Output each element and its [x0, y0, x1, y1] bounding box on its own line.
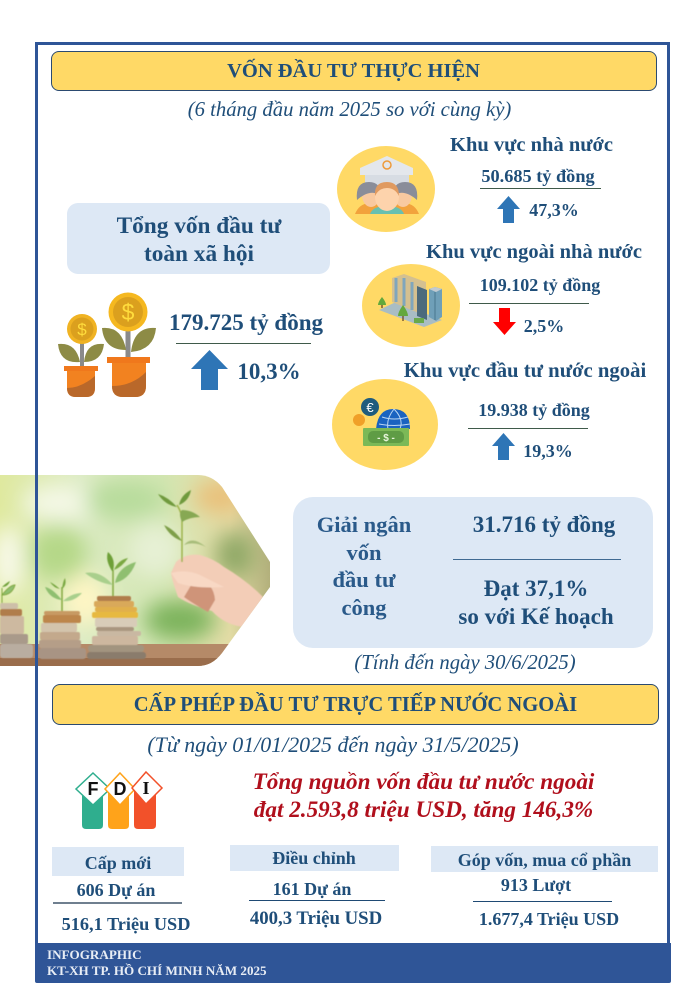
icon: foreign investment: - $ - — [377, 433, 395, 444]
heading: Vốn đầu tư thực hiện: VỐN ĐẦU TƯ THỰC HIỆN — [227, 60, 480, 82]
value: contribution capital: 1.677,4 Triệu USD — [479, 909, 619, 929]
footer text: INFOGRAPHIC — [47, 947, 142, 962]
panel: new licences header — [52, 847, 184, 876]
subtitle: FDI period: (Từ ngày 01/01/2025 đến ngày 31/5/2025) — [147, 732, 519, 757]
value: contribution count: 913 Lượt — [501, 875, 571, 895]
text: public investment label — [317, 512, 411, 620]
icon: foreign investment: € — [366, 400, 374, 415]
banner: heading 2 — [52, 684, 659, 725]
footer text — [47, 947, 267, 978]
value: plan percentage: Đạt 37,1% — [484, 576, 588, 601]
subtitle: period: (6 tháng đầu năm 2025 so với cùng kỳ) — [188, 99, 511, 121]
value: total: 179.725 tỷ đồng — [169, 310, 323, 335]
panel: adjustment header — [230, 845, 399, 871]
value: total growth: 10,3% — [237, 359, 301, 384]
seedlings — [112, 570, 114, 596]
footer band — [35, 943, 670, 983]
icon: arrow up — [191, 350, 228, 390]
icon: FDI: D — [114, 779, 126, 799]
icon: arrow up — [497, 196, 520, 223]
banner: heading 1 — [51, 51, 657, 91]
coins right — [97, 596, 131, 601]
value: non-state sector: 109.102 tỷ đồng — [480, 275, 600, 295]
icon: arrow down — [493, 308, 516, 335]
text: total investment: Tổng vốn đầu tư — [117, 213, 281, 239]
hand — [171, 555, 263, 627]
icon: FDI — [75, 770, 163, 829]
callout: total FDI: Tổng nguồn vốn đầu tư nước ngoài — [253, 769, 594, 795]
heading: foreign sector: Khu vực đầu tư nước ngoài — [404, 360, 646, 382]
text: adjustment: Điều chỉnh — [272, 848, 356, 868]
value: plan percentage: so với Kế hoạch — [458, 604, 614, 629]
icon: foreign investment — [332, 379, 438, 470]
icon: FDI: F — [88, 779, 98, 799]
icon: money plants — [58, 292, 156, 397]
value: state sector: 50.685 tỷ đồng — [481, 166, 595, 186]
value: non-state change: 2,5% — [524, 316, 564, 336]
value: disbursed amount: 31.716 tỷ đồng — [473, 512, 615, 537]
value: foreign sector: 19.938 tỷ đồng — [478, 400, 590, 420]
heading: state sector: Khu vực nhà nước — [450, 134, 613, 156]
footer text: KT-XH TP. HỒ CHÍ MINH NĂM 2025 — [47, 963, 267, 978]
icon: money plants: $ — [122, 299, 135, 325]
heading: non-state sector: Khu vực ngoài nhà nước — [426, 241, 642, 263]
text: public investment label: đầu tư — [333, 567, 395, 592]
coins middle — [44, 611, 80, 615]
callout: total FDI: đạt 2.593,8 triệu USD, tăng 146,3% — [254, 796, 593, 822]
panel: total investment label — [67, 203, 330, 274]
value: new capital: 516,1 Triệu USD — [62, 914, 190, 934]
panel: public investment disbursement — [293, 497, 653, 648]
text: new licences: Cấp mới — [85, 853, 151, 873]
value: adjusted projects: 161 Dự án — [273, 879, 351, 899]
text: public investment label: Giải ngân — [317, 512, 411, 537]
icon: arrow up — [492, 433, 515, 460]
text: capital contribution: Góp vốn, mua cổ phần — [458, 850, 631, 870]
value: foreign growth: 19,3% — [523, 441, 573, 461]
value: plan percentage — [458, 576, 614, 629]
icon: FDI: I — [142, 778, 150, 798]
panel: capital contribution header — [431, 846, 658, 872]
value: adjusted capital: 400,3 Triệu USD — [250, 908, 382, 929]
icon: non-state sector — [362, 264, 460, 347]
text: total investment — [117, 213, 282, 267]
text: total investment: toàn xã hội — [144, 241, 254, 267]
value: new projects: 606 Dự án — [77, 880, 155, 900]
note: date: (Tính đến ngày 30/6/2025) — [354, 652, 576, 674]
coins left — [0, 603, 18, 609]
photo: coins and seedling — [0, 475, 270, 666]
icon: money plants: $ — [77, 320, 87, 339]
text: public investment label: công — [342, 595, 386, 620]
value: state growth: 47,3% — [529, 200, 579, 220]
heading: FDI licensing: CẤP PHÉP ĐẦU TƯ TRỰC TIẾP NƯỚC NGOÀI — [134, 694, 577, 716]
text: public investment label: vốn — [346, 540, 382, 565]
icon: state sector — [337, 146, 435, 232]
callout: total FDI — [253, 769, 594, 822]
held seedling — [177, 505, 182, 562]
